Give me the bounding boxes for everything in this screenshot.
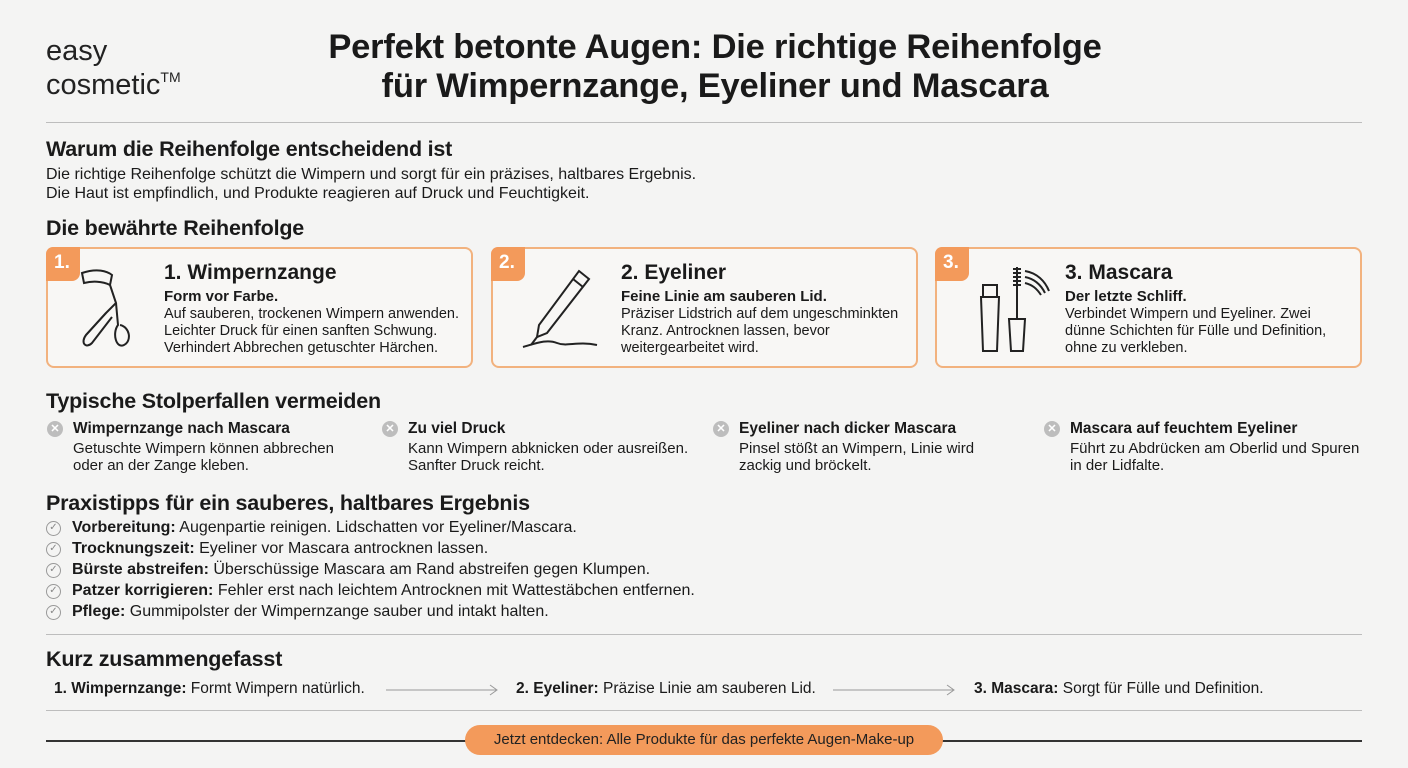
logo (46, 35, 181, 101)
tips list: ✓ (49, 542, 58, 554)
title: Perfekt betonte Augen: Die richtige Reihenfolge (328, 28, 1102, 66)
summary row: 3. Mascara: Sorgt für Fülle und Definition. (974, 680, 1264, 697)
pitfall 3: zackig und bröckelt. (739, 457, 872, 474)
pitfall 4: in der Lidfalte. (1070, 457, 1164, 474)
text: ✕ (716, 423, 726, 435)
card 2: Feine Linie am sauberen Lid. (621, 288, 827, 305)
card 1: Auf sauberen, trockenen Wimpern anwenden. (164, 306, 459, 322)
summary row (54, 680, 1264, 697)
heading: stolperfallen: Typische Stolperfallen vermeiden (46, 389, 381, 413)
icon: mascara (980, 267, 1050, 352)
pitfall 1: Wimpernzange nach Mascara (73, 420, 290, 437)
card 1: 1. Wimpernzange (164, 261, 337, 284)
card 3: dünne Schichten für Fülle und Definition, (1065, 323, 1326, 339)
tips list (46, 519, 695, 620)
card 3: ohne zu verkleben. (1065, 340, 1188, 356)
card 3: 3. Mascara (1065, 261, 1172, 284)
logo: cosmeticTM (46, 69, 181, 101)
tips list: Bürste abstreifen: Überschüssige Mascara am Rand abstreifen gegen Klumpen. (72, 561, 650, 578)
tips list: Vorbereitung: Augenpartie reinigen. Lidschatten vor Eyeliner/Mascara. (72, 519, 577, 536)
summary row: 1. Wimpernzange: Formt Wimpern natürlich. (54, 680, 365, 697)
intro text: Die richtige Reihenfolge schützt die Wimpern und sorgt für ein präzises, haltbares Ergebnis. (46, 166, 696, 183)
pitfall 1: Getuschte Wimpern können abbrechen (73, 440, 334, 457)
tips list: Trocknungszeit: Eyeliner vor Mascara antrocknen lassen. (72, 540, 488, 557)
heading: reihenfolge: Die bewährte Reihenfolge (46, 216, 304, 240)
icon: lash curler (80, 269, 130, 347)
card 2: weitergearbeitet wird. (621, 340, 759, 356)
pitfall 3 (713, 420, 974, 474)
logo: easy (46, 35, 107, 67)
card 1: Form vor Farbe. (164, 288, 278, 305)
call to action button (465, 725, 943, 755)
pitfall 2: Kann Wimpern abknicken oder ausreißen. (408, 440, 688, 457)
card 2: 2. Eyeliner (621, 261, 726, 284)
card 1: Leichter Druck für einen sanften Schwung. (164, 323, 437, 339)
tips list: Pflege: Gummipolster der Wimpernzange sauber und intakt halten. (72, 603, 549, 620)
tips list: ✓ (49, 564, 58, 574)
summary row: 2. Eyeliner: Präzise Linie am sauberen Lid. (516, 680, 816, 697)
pitfall 4: Mascara auf feuchtem Eyeliner (1070, 420, 1297, 437)
card 3: Verbindet Wimpern und Eyeliner. Zwei (1065, 306, 1311, 322)
pitfall 2: Zu viel Druck (408, 420, 505, 437)
pitfall 1 (47, 420, 334, 474)
card 1: Verhindert Abbrechen getuschter Härchen. (164, 340, 438, 356)
pitfall 2: Sanfter Druck reicht. (408, 457, 545, 474)
card 2: Präziser Lidstrich auf dem ungeschminkten (621, 306, 898, 322)
text: ✕ (50, 423, 60, 435)
pitfall 4 (1044, 420, 1359, 474)
call to action button: Jetzt entdecken: Alle Produkte für das perfekte Augen-Make-up (494, 731, 914, 748)
pitfall 4: Führt zu Abdrücken am Oberlid und Spuren (1070, 440, 1359, 457)
tips list: ✓ (49, 522, 58, 532)
card 1 (46, 247, 473, 368)
tips list: ✓ (49, 606, 58, 616)
intro text (46, 166, 696, 202)
heading: kurz: Kurz zusammengefasst (46, 647, 282, 671)
tips list: ✓ (49, 584, 58, 596)
card 3 (935, 247, 1362, 368)
card 2: 2. (499, 252, 515, 273)
heading: warum: Warum die Reihenfolge entscheidend ist (46, 137, 452, 161)
arrow 2 (833, 684, 955, 696)
pitfall 3: Eyeliner nach dicker Mascara (739, 420, 956, 437)
card 1: 1. (54, 252, 70, 273)
text: ✕ (385, 423, 395, 435)
icon: eyeliner pen (522, 270, 598, 348)
card 2: Kranz. Antrocknen lassen, bevor (621, 323, 830, 339)
title (328, 28, 1102, 105)
arrow 1 (386, 684, 498, 696)
pitfall 2 (382, 420, 688, 474)
card 2 (491, 247, 918, 368)
card 3: Der letzte Schliff. (1065, 288, 1187, 305)
intro text: Die Haut ist empfindlich, und Produkte reagieren auf Druck und Feuchtigkeit. (46, 185, 589, 202)
pitfall 3: Pinsel stößt an Wimpern, Linie wird (739, 440, 974, 457)
text: ✕ (1047, 423, 1057, 435)
title: für Wimpernzange, Eyeliner und Mascara (382, 67, 1048, 105)
heading: praxistipps: Praxistipps für ein sauberes, haltbares Ergebnis (46, 491, 530, 515)
card 3: 3. (943, 252, 959, 273)
tips list: Patzer korrigieren: Fehler erst nach leichtem Antrocknen mit Wattestäbchen entfernen. (72, 582, 695, 599)
pitfall 1: oder an der Zange kleben. (73, 457, 249, 474)
